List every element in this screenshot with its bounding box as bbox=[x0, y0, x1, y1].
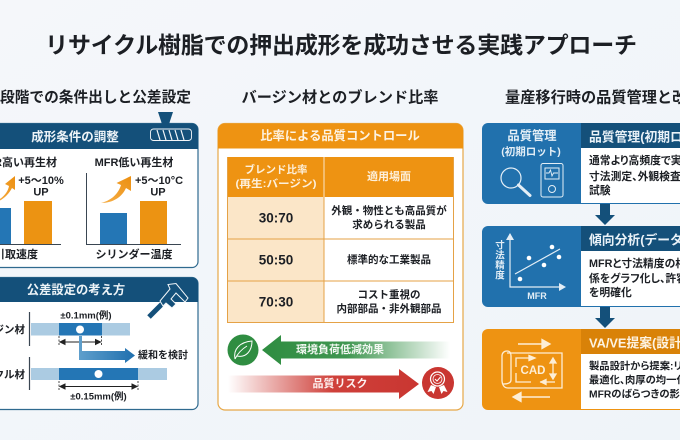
panel heading: 公差設定の考え方 bbox=[27, 282, 125, 297]
icon: extruder screw bbox=[150, 112, 192, 140]
chart icon: scatter plot: 法 bbox=[495, 250, 505, 262]
panel: molding condition adjustment bbox=[0, 112, 198, 268]
chart: MFR low recycled: UP bbox=[150, 186, 166, 198]
chart: MFR low recycled: MFR低い再生材 bbox=[95, 155, 173, 169]
chart icon: scatter plot: 度 bbox=[495, 270, 505, 282]
chart icon: scatter plot bbox=[495, 233, 566, 301]
panel: quality control initial lot bbox=[482, 123, 680, 204]
panel: trend analysis: を明確化 bbox=[589, 285, 632, 299]
chart: MFR high recycled: UP bbox=[33, 186, 49, 198]
arrow: relax tolerance bbox=[79, 336, 188, 363]
table: blend ratios: 内部部品・非外観部品 bbox=[336, 302, 442, 315]
table: blend ratios: (再生:バージン) bbox=[236, 177, 316, 190]
heading: middle column: バージン材とのブレンド比率 bbox=[242, 88, 438, 106]
chart: MFR high recycled: +5〜10% bbox=[18, 175, 64, 187]
chart: MFR low recycled bbox=[86, 155, 183, 261]
panel: VA/VE proposal bbox=[482, 329, 680, 410]
table: blend ratios: 適用場面 bbox=[367, 169, 411, 183]
arrow: quality risk bbox=[228, 369, 419, 399]
table: blend ratios: 求められる製品 bbox=[352, 218, 426, 231]
chart: MFR low recycled: +5〜10°C bbox=[135, 175, 183, 187]
panel heading: 比率による品質コントロール bbox=[260, 128, 420, 143]
arrow: relax tolerance: 緩和を検討 bbox=[138, 348, 188, 362]
row: virgin material tolerance bbox=[0, 310, 130, 346]
icon: quality badge bbox=[422, 367, 454, 399]
panel: trend analysis bbox=[482, 226, 680, 307]
chart icon: scatter plot: MFR bbox=[527, 291, 547, 301]
table: blend ratios bbox=[227, 157, 454, 323]
chart: MFR high recycled bbox=[0, 155, 64, 261]
chart icon: scatter plot: 精 bbox=[495, 260, 505, 272]
chart: MFR low recycled: シリンダー温度 bbox=[96, 247, 172, 261]
table: blend ratios: ブレンド比率 bbox=[244, 163, 308, 176]
icon: measuring device bbox=[541, 164, 563, 197]
panel heading: 成形条件の調整 bbox=[31, 129, 119, 144]
arrow: step one to two bbox=[595, 204, 615, 225]
panel: blend ratio bbox=[218, 124, 463, 410]
arrow: environmental benefit: 環境負荷低減効果 bbox=[296, 342, 384, 356]
table: blend ratios: 70:30 bbox=[259, 294, 293, 310]
icon: leaf bbox=[228, 334, 258, 366]
table: blend ratios: 50:50 bbox=[259, 252, 293, 268]
panel: quality control initial lot: 試験 bbox=[589, 183, 611, 197]
chart icon: scatter plot: 寸 bbox=[495, 240, 505, 252]
panel: quality control initial lot: 品質管理 bbox=[507, 128, 557, 143]
table: blend ratios: コスト重視の bbox=[358, 288, 420, 301]
row: virgin material tolerance: ±0.1mm(例) bbox=[60, 310, 112, 322]
icon: caliper bbox=[149, 284, 188, 317]
row: recycled material tolerance: ±0.15mm(例) bbox=[70, 390, 127, 402]
icon: CAD blueprint bbox=[502, 340, 562, 402]
arrow: step two to three bbox=[595, 307, 615, 328]
panel: quality control initial lot: (初期ロット) bbox=[501, 145, 561, 158]
icon: CAD blueprint: CAD bbox=[521, 365, 545, 377]
table: blend ratios: 外観・物性とも高品質が bbox=[331, 204, 447, 217]
icon: magnifier bbox=[501, 168, 530, 196]
table: blend ratios: 標準的な工業製品 bbox=[347, 253, 431, 266]
panel: tolerance setting bbox=[0, 278, 198, 410]
arrow: environmental benefit bbox=[262, 335, 450, 365]
title: リサイクル樹脂での押出成形を成功させる実践アプローチ bbox=[45, 32, 637, 58]
arrow: quality risk: 品質リスク bbox=[312, 376, 368, 390]
table: blend ratios: 30:70 bbox=[259, 210, 293, 226]
row: recycled material tolerance bbox=[0, 357, 167, 402]
